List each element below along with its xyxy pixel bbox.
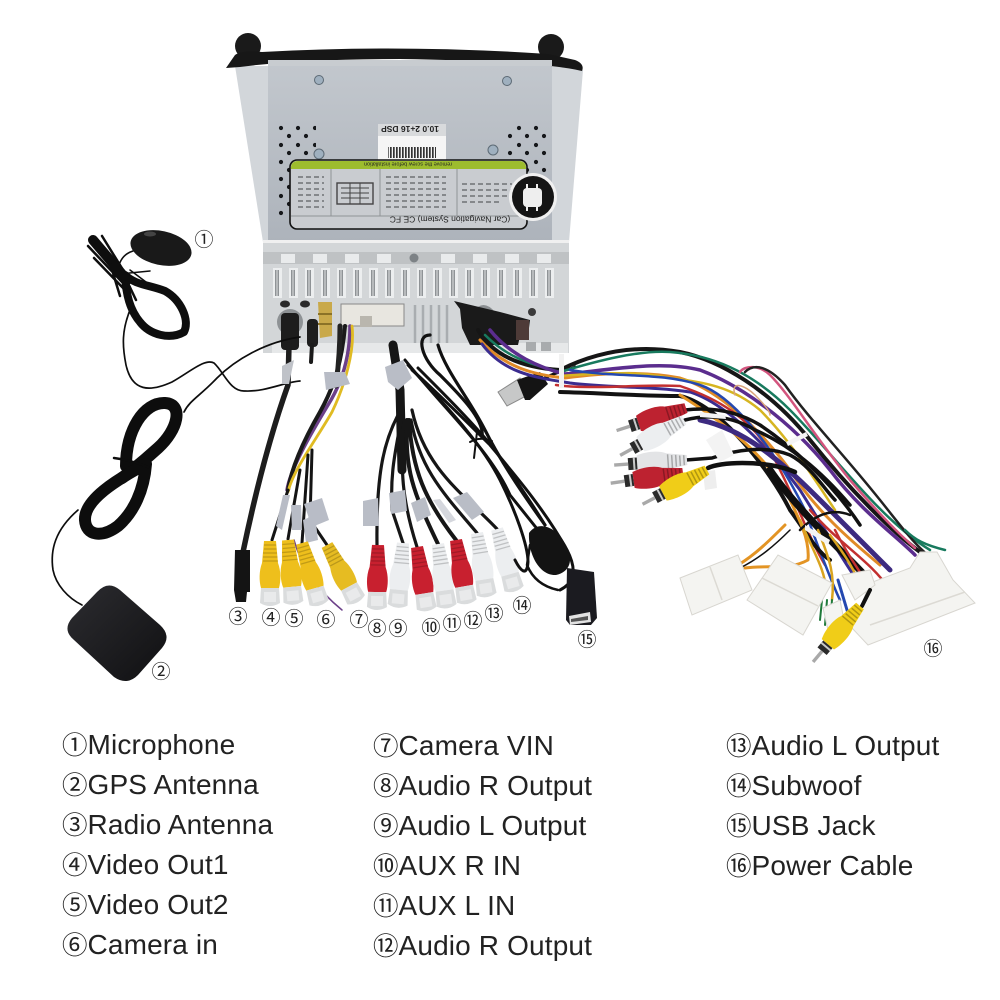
round black sticker <box>509 173 557 221</box>
legend column 3: ⑬Audio L Output <box>726 726 939 763</box>
legend column 1: ②GPS Antenna <box>62 765 259 802</box>
video cable bundle <box>272 326 353 610</box>
legend column 2: ⑪AUX L IN <box>373 886 515 923</box>
numbered callouts on photo: ⑥ <box>316 605 336 632</box>
mic jack cable stub <box>311 345 312 362</box>
power harness wires <box>478 330 945 625</box>
numbered callouts on photo: ⑮ <box>577 625 597 652</box>
vent holes right <box>506 125 550 191</box>
harness zip ties and tags <box>559 354 830 545</box>
GPS antenna <box>52 337 300 681</box>
side wings <box>235 66 583 242</box>
numbered callouts on photo: ① <box>194 225 214 252</box>
USB jack <box>566 568 597 625</box>
legend column 3 <box>726 726 939 883</box>
legend column 2: ⑦Camera VIN <box>373 726 554 763</box>
yellow camera plug <box>805 590 870 669</box>
legend column 1: ⑤Video Out2 <box>62 885 229 922</box>
numbered callouts on photo: ⑨ <box>388 614 408 641</box>
model label <box>378 124 446 162</box>
numbered callouts on photo: ⑤ <box>284 604 304 631</box>
numbered callouts on photo: ⑯ <box>923 634 943 661</box>
numbered callouts on photo: ⑪ <box>442 609 462 636</box>
legend column 2 <box>373 726 592 963</box>
white power connectors <box>680 552 975 645</box>
wiring sticker: (Car Navigation System) CE FC <box>390 214 510 224</box>
numbered callouts on photo: ⑩ <box>421 613 441 640</box>
numbered callouts on photo: ⑬ <box>484 599 504 626</box>
microphone <box>88 225 300 391</box>
legend column 2: ⑧Audio R Output <box>373 766 592 803</box>
male RCA wires <box>685 409 860 525</box>
USB plug <box>498 367 575 406</box>
legend column 1: ③Radio Antenna <box>62 805 273 842</box>
numbered callouts on photo: ⑦ <box>349 605 369 632</box>
video cable tags <box>276 372 350 543</box>
model label: 10.0 2+16 DSP <box>381 124 439 134</box>
wiring sticker: remove the screw before installation <box>364 160 452 166</box>
numbered callouts on photo: ④ <box>261 603 281 630</box>
male RCA plugs <box>609 398 712 514</box>
USB cable loops <box>405 335 573 590</box>
rear panel <box>263 240 569 353</box>
legend column 3: ⑮USB Jack <box>726 806 876 843</box>
front bezel and knobs <box>226 33 583 71</box>
mic dome <box>127 225 195 271</box>
radio antenna cable <box>234 345 294 602</box>
RCA tags <box>363 360 484 526</box>
legend column 2: ⑨Audio L Output <box>373 806 586 843</box>
black ISO connector <box>454 301 551 351</box>
legend column 2: ⑫Audio R Output <box>373 926 592 963</box>
mic cable coil <box>88 236 300 391</box>
GPS cable coil <box>52 337 300 605</box>
legend column 1: ①Microphone <box>62 725 235 762</box>
antenna and mic ports <box>277 300 332 350</box>
USB dongle <box>529 526 570 575</box>
numbered callouts on photo: ⑭ <box>512 591 532 618</box>
screws <box>314 76 512 159</box>
legend column 1 <box>62 725 273 962</box>
numbered callouts on photo: ③ <box>228 602 248 629</box>
GPS puck <box>67 585 167 681</box>
legend column 1: ⑥Camera in <box>62 925 218 962</box>
legend column 3: ⑭Subwoof <box>726 766 862 803</box>
legend column 2: ⑩AUX R IN <box>373 846 521 883</box>
white multi-pin connector <box>341 304 404 327</box>
numbered callouts on photo: ⑫ <box>463 606 483 633</box>
yellow and red/white RCA plugs <box>260 526 525 613</box>
numbered callouts on photo <box>151 225 943 684</box>
numbered callouts on photo: ② <box>151 657 171 684</box>
RCA wire fan <box>377 345 497 547</box>
vent holes left <box>278 125 316 217</box>
legend column 1: ④Video Out1 <box>62 845 229 882</box>
legend column 3: ⑯Power Cable <box>726 846 913 883</box>
wiring sticker <box>290 160 527 229</box>
head unit <box>226 33 583 353</box>
top plate <box>268 66 552 242</box>
numbered callouts on photo: ⑧ <box>367 614 387 641</box>
